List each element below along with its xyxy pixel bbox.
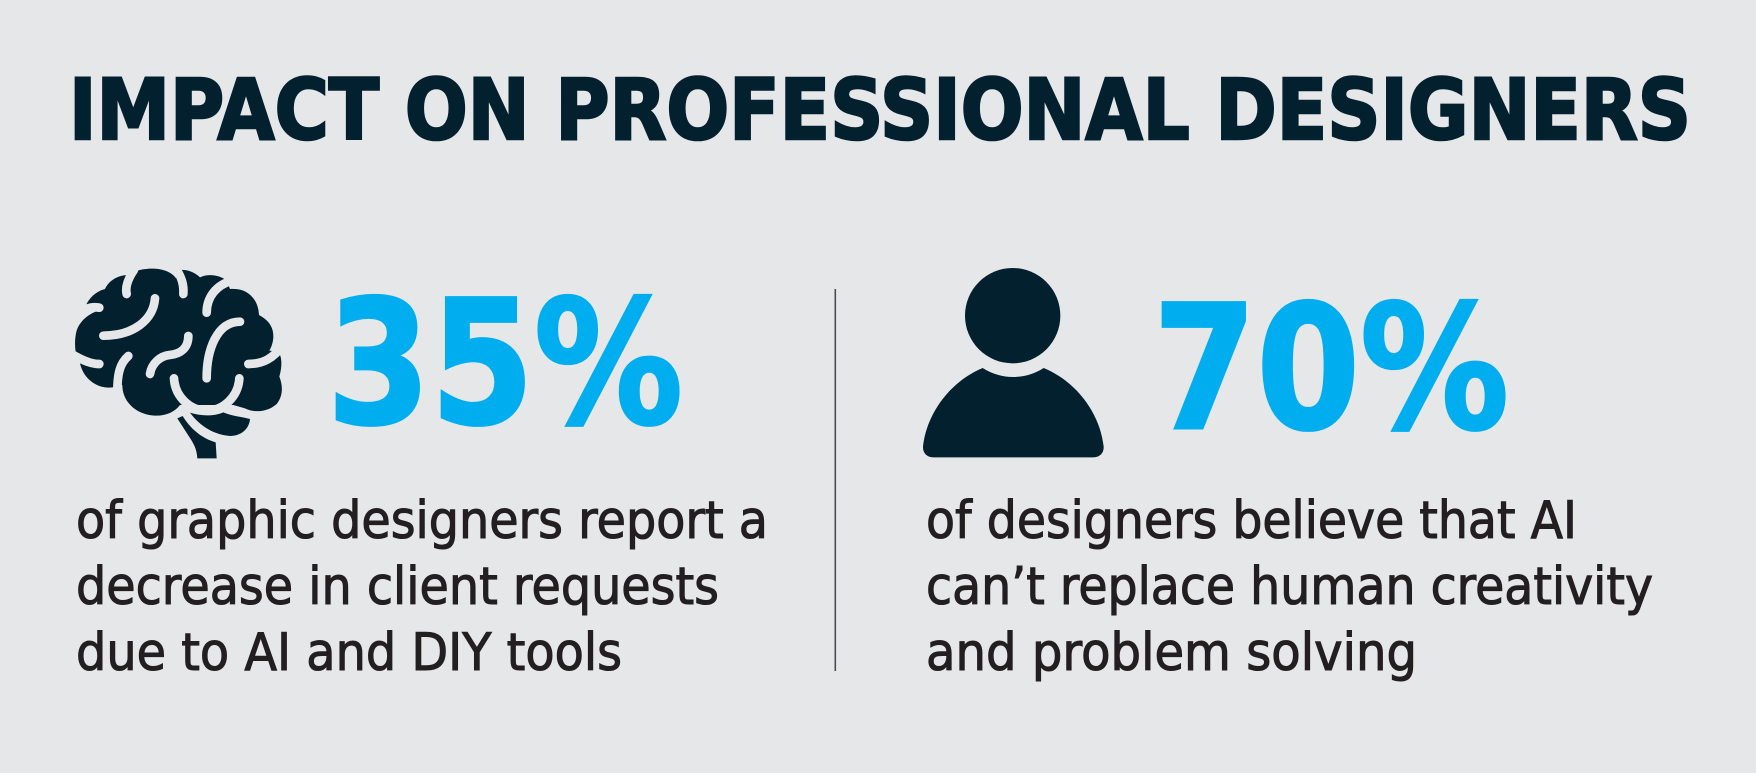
- text: left description: of graphic designers report a: [76, 491, 768, 551]
- divider: [834, 289, 836, 671]
- icon: person: [923, 268, 1104, 457]
- icon: brain: [74, 269, 284, 458]
- stat: 35%: 35%: [327, 263, 683, 464]
- text: left description: due to AI and DIY tools: [76, 623, 622, 683]
- text: right description: of designers believe that AI: [926, 491, 1577, 551]
- text: right description: [926, 491, 1653, 683]
- text: left description: decrease in client requests: [76, 557, 719, 617]
- text: right description: and problem solving: [926, 623, 1417, 683]
- text: right description: can’t replace human creativity: [926, 557, 1653, 617]
- text: left description: [76, 491, 768, 683]
- stat: 70%: 70%: [1153, 268, 1509, 469]
